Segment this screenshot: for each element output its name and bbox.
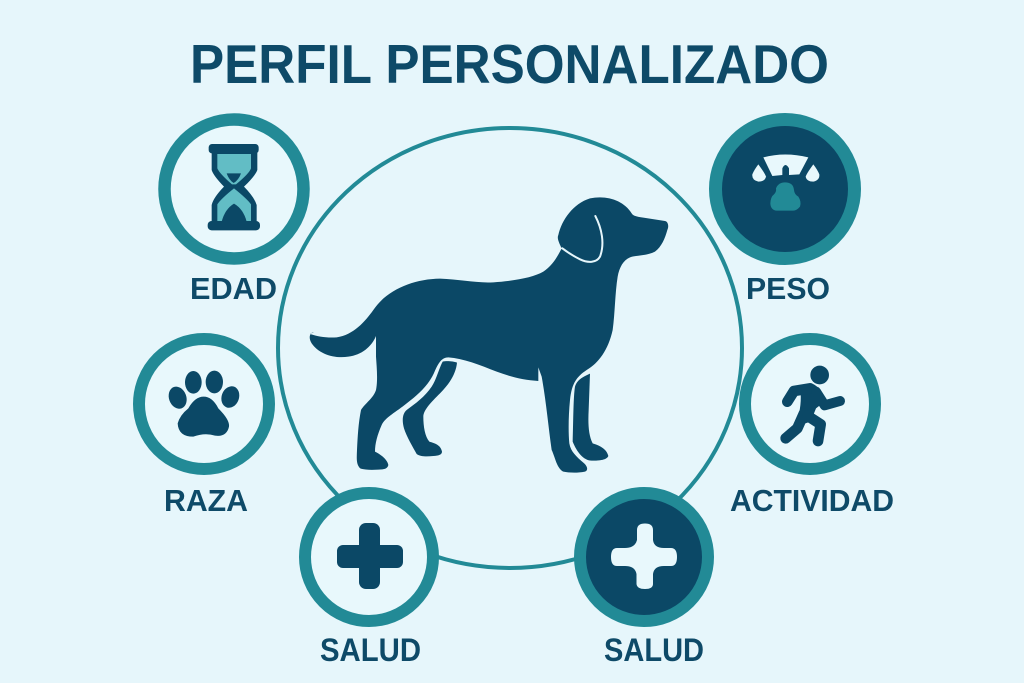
ear outline bbox=[562, 216, 602, 262]
label: edad: EDAD bbox=[190, 271, 277, 306]
icon: paw bbox=[166, 371, 242, 437]
icon: dark cross bbox=[337, 523, 403, 589]
ring: salud left bbox=[305, 493, 433, 621]
title: PERFIL PERSONALIZADO bbox=[190, 33, 829, 95]
icon: hourglass bbox=[208, 144, 260, 230]
ring: actividad bbox=[745, 339, 875, 469]
large ring around the dog bbox=[278, 128, 742, 568]
icon: runner bbox=[786, 366, 840, 441]
ring: salud right bbox=[580, 493, 708, 621]
ring: peso bbox=[716, 120, 854, 258]
label: peso: PESO bbox=[746, 271, 830, 306]
ring: raza bbox=[139, 339, 269, 469]
label: salud right: SALUD bbox=[604, 632, 704, 668]
icon: weight scale bbox=[752, 154, 819, 211]
dog silhouette bbox=[310, 197, 668, 473]
label: salud left: SALUD bbox=[320, 632, 421, 668]
icon: light cross bbox=[611, 524, 677, 589]
label: raza: RAZA bbox=[164, 483, 248, 518]
label: actividad: ACTIVIDAD bbox=[730, 483, 894, 518]
ring: edad bbox=[164, 120, 304, 258]
